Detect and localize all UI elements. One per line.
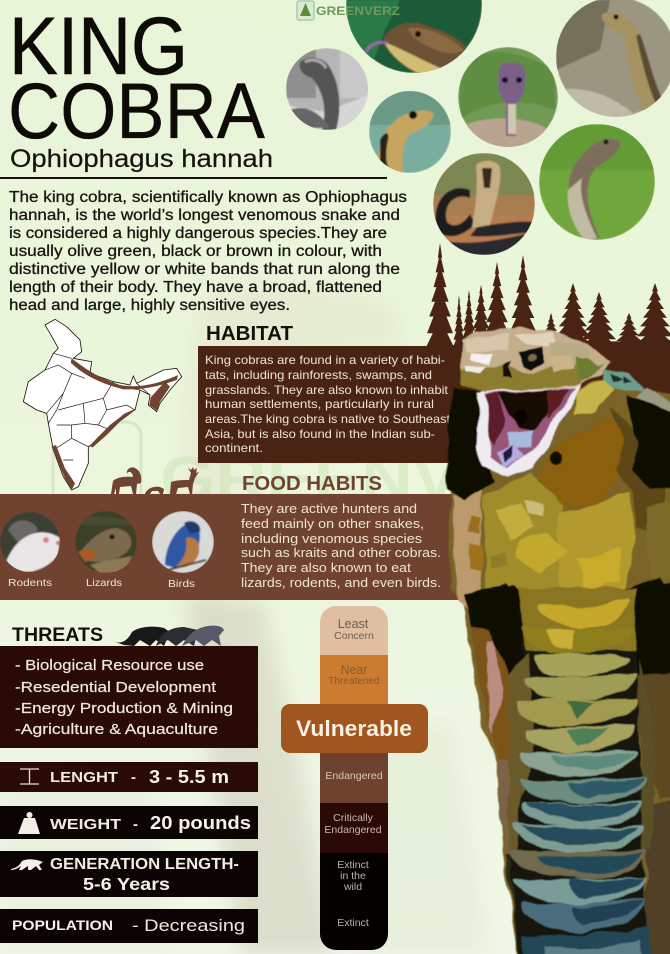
status: least concern bbox=[334, 617, 374, 642]
panel: habitat text: King cobras are found in a variety of habi- bbox=[205, 353, 445, 367]
panel: habitat text: human settlements, particularly in rural bbox=[205, 397, 434, 411]
panel: threats list: -Resedential Development bbox=[15, 680, 216, 696]
photo: lizards bbox=[75, 511, 137, 573]
open mouth bbox=[475, 383, 580, 476]
food habits heading: FOOD HABITS bbox=[242, 473, 382, 495]
illustration: king cobra bbox=[446, 327, 670, 954]
status: critically endangered: Critically bbox=[333, 812, 374, 824]
watermark: Greenverz: GREENV bbox=[160, 445, 460, 514]
photo: cobra with black coil bbox=[433, 153, 535, 255]
belly scales, in zoomed coordinates bbox=[508, 588, 653, 954]
photo: golden snake on teal bbox=[369, 90, 451, 175]
photo: snake on muted background bbox=[556, 0, 670, 120]
neck stripes bbox=[573, 370, 670, 417]
food habits text: including venomous species bbox=[241, 532, 422, 546]
status: extinct in the wild: wild bbox=[343, 881, 362, 893]
black neck patch bbox=[446, 387, 497, 500]
panel: threats list bbox=[0, 646, 258, 748]
panel: habitat text: grasslands. They are also known to inhabit bbox=[205, 383, 449, 397]
background watermark: ghost snake bbox=[0, 284, 490, 954]
status: near threatened: Threatened bbox=[328, 676, 380, 687]
panel: weight: 20 pounds bbox=[150, 813, 251, 833]
title bbox=[8, 1, 265, 155]
forest silhouette bbox=[425, 243, 670, 463]
threats heading: THREATS bbox=[12, 625, 103, 646]
map: India distribution bbox=[23, 319, 182, 490]
icon: weight bbox=[18, 812, 40, 834]
panel: generation length: GENERATION LENGTH- bbox=[50, 856, 239, 873]
watermark: Greenverz bbox=[53, 422, 460, 534]
panel: population bbox=[0, 909, 258, 943]
status: endangered: Endangered bbox=[325, 770, 383, 782]
status: vulnerable bbox=[281, 704, 428, 753]
logo: Greenverz bbox=[297, 1, 400, 20]
panel: population: POPULATION bbox=[12, 918, 113, 933]
status: critically endangered bbox=[324, 812, 382, 836]
panel: habitat text: Asia, but is also found in the Indian sub- bbox=[205, 427, 435, 441]
panel: habitat text: areas.The king cobra is native to Southeast bbox=[205, 412, 451, 426]
label: lizards: Lizards bbox=[86, 577, 122, 589]
panel: threats list: -Agriculture & Aquaculture bbox=[15, 722, 218, 738]
photo: birds bbox=[152, 511, 214, 573]
panel: population: - Decreasing bbox=[132, 916, 245, 935]
status: extinct in the wild: in the bbox=[340, 870, 366, 882]
status: critically endangered: Endangered bbox=[324, 824, 382, 836]
intro paragraph: length of their body. They have a broad, flattened bbox=[9, 279, 382, 296]
intro paragraph: usually olive green, black or brown in colour, with bbox=[9, 243, 382, 260]
photo: engraving of cobra bbox=[286, 48, 370, 135]
panel: habitat text: tats, including rainforests, swamps, and bbox=[205, 368, 432, 382]
intro paragraph: The king cobra, scientifically known as Ophiophagus bbox=[9, 189, 407, 206]
panel: threats list: - Biological Resource use bbox=[15, 658, 204, 674]
title: COBRA bbox=[8, 66, 265, 155]
intro paragraph: hannah, is the world’s longest venomous snake and bbox=[9, 207, 400, 224]
cobra body base bbox=[447, 380, 670, 954]
panel: length: - bbox=[131, 769, 136, 786]
status: extinct in the wild: Extinct bbox=[337, 859, 369, 871]
title rule bbox=[0, 177, 387, 179]
intro paragraph bbox=[9, 189, 407, 314]
status: extinct in the wild bbox=[337, 859, 369, 893]
panel: generation length bbox=[0, 851, 258, 897]
panel: weight bbox=[0, 806, 258, 839]
panel: food habits band bbox=[0, 494, 465, 600]
panel: length: 3 - 5.5 m bbox=[149, 767, 229, 787]
panel: weight: - bbox=[133, 816, 138, 833]
title: KING bbox=[9, 1, 188, 92]
panel: habitat text: continent. bbox=[205, 441, 263, 455]
panel: weight: WEIGHT bbox=[50, 816, 121, 833]
status: least concern: Concern bbox=[334, 630, 374, 642]
intro paragraph: is considered a highly dangerous species.They are bbox=[9, 225, 387, 242]
panel: length bbox=[0, 762, 258, 792]
gold chest, in zoomed coordinates bbox=[469, 407, 670, 603]
side dark blotches bbox=[465, 395, 670, 690]
food habits text: such as kraits and other cobras. bbox=[241, 546, 441, 560]
icon: wildlife silhouettes bbox=[111, 467, 199, 494]
black spot on chest bbox=[551, 449, 563, 465]
intro paragraph: distinctive yellow or white bands that run along the bbox=[9, 261, 400, 278]
label: birds: Birds bbox=[168, 578, 195, 590]
habitat heading: HABITAT bbox=[206, 323, 293, 345]
icon: big cat silhouettes bbox=[115, 626, 224, 646]
head bbox=[460, 327, 670, 417]
food habits text bbox=[241, 502, 441, 590]
panel: habitat text bbox=[198, 346, 460, 463]
panel: length: LENGHT bbox=[50, 769, 118, 786]
intro paragraph: head and large, highly sensitive eyes. bbox=[9, 297, 290, 314]
status: least concern: Least bbox=[338, 617, 369, 631]
food habits text: They are also known to eat bbox=[241, 561, 412, 575]
logo: Greenverz: GREENVERZ bbox=[316, 4, 400, 18]
icon: length measure bbox=[20, 769, 39, 784]
photo: snake head with tongue bbox=[346, 0, 482, 76]
photo: grey cobra on green bbox=[539, 124, 655, 240]
panel: generation length: 5-6 Years bbox=[83, 874, 170, 894]
food habits text: They are active hunters and bbox=[241, 502, 417, 516]
food habits text: feed mainly on other snakes, bbox=[241, 517, 424, 531]
status: vulnerable: Vulnerable bbox=[296, 716, 412, 741]
status: near threatened: Near bbox=[340, 663, 368, 677]
panel: threats list: -Energy Production & Mining bbox=[15, 701, 233, 717]
status: extinct: Extinct bbox=[337, 917, 369, 929]
left mottled edge bbox=[452, 490, 535, 954]
chart: conservation status scale bbox=[281, 606, 428, 950]
icon: big cat bbox=[11, 859, 43, 870]
food habits text: lizards, rodents, and even birds. bbox=[241, 576, 441, 590]
subtitle: scientific name: Ophiophagus hannah bbox=[10, 145, 273, 173]
photo: spectacled cobra on grass bbox=[458, 47, 558, 150]
photo: rodents bbox=[0, 512, 60, 573]
status: near threatened bbox=[328, 663, 380, 687]
label: rodents: Rodents bbox=[8, 577, 52, 589]
